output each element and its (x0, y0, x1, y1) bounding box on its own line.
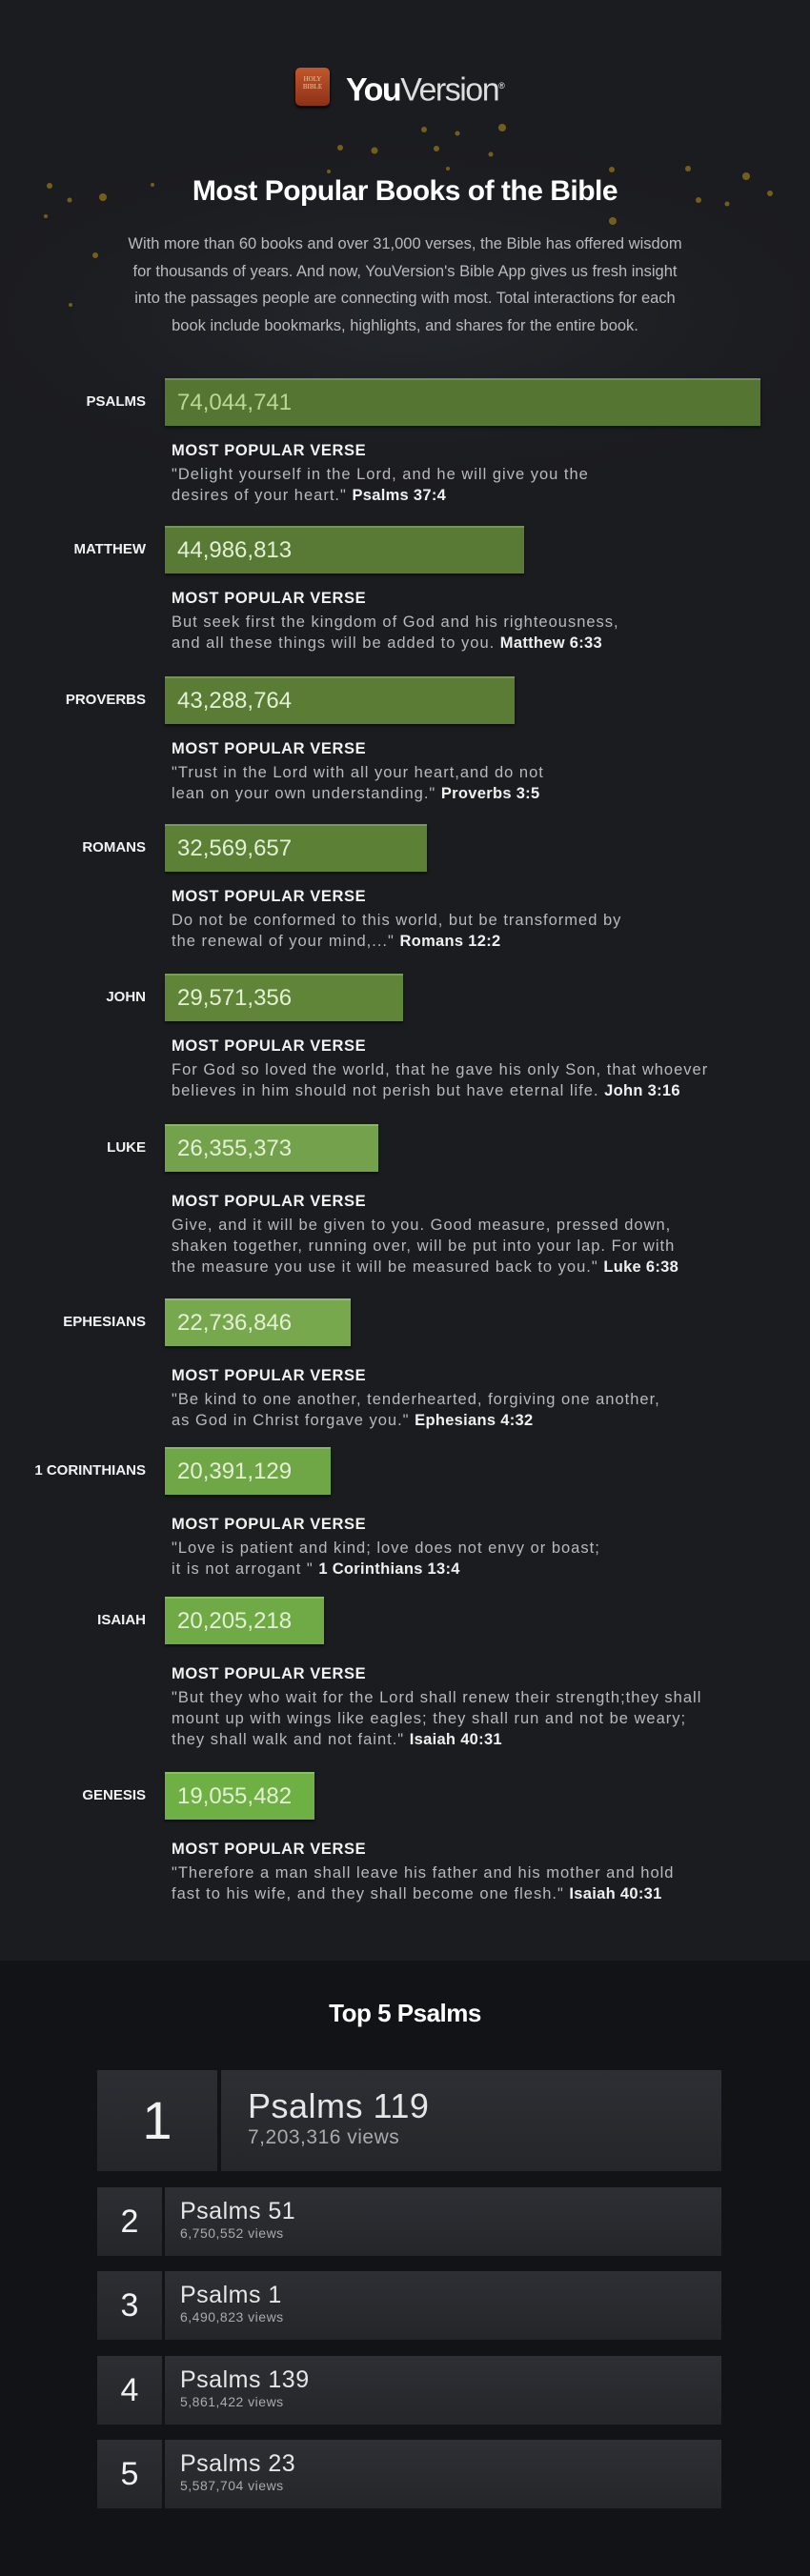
panel: Isaiah: they shall walk and not faint." Isaiah 40:31 (172, 1731, 502, 1748)
panel: Ephesians: EPHESIANS (63, 1314, 146, 1330)
row 4 (97, 2356, 721, 2425)
row 4: Psalms 139 (180, 2366, 310, 2393)
row 5: Psalms 23 (180, 2450, 295, 2477)
logo (294, 68, 505, 109)
bar: Ephesians: 22,736,846 (177, 1310, 292, 1336)
row 2: 6,750,552 views (180, 2225, 284, 2241)
panel: Genesis (82, 1772, 674, 1902)
intro text: into the passages people are connecting with most. Total interactions for each (134, 290, 676, 307)
panel: Romans: MOST POPULAR VERSE (172, 888, 366, 905)
bar: Psalms (165, 378, 760, 426)
bar: Genesis (165, 1772, 314, 1820)
row 1: 1 (142, 2090, 172, 2150)
row 2: Psalms 51 (180, 2198, 295, 2224)
panel: Luke: shaken together, running over, will be put into your lap. For with (172, 1238, 675, 1255)
panel: Romans: ROMANS (82, 839, 146, 855)
panel: Ephesians: "Be kind to one another, tenderhearted, forgiving one another, (172, 1391, 660, 1408)
row 5: 5,587,704 views (180, 2478, 284, 2493)
panel: 1 Corinthians: it is not arrogant " 1 Corinthians 13:4 (172, 1560, 460, 1578)
panel: Proverbs: MOST POPULAR VERSE (172, 740, 366, 757)
row 1: Psalms 119 (248, 2086, 429, 2125)
panel: Ephesians (63, 1298, 660, 1429)
bar: John: 29,571,356 (177, 985, 292, 1011)
row 2 (97, 2187, 721, 2256)
row 3: 6,490,823 views (180, 2309, 284, 2324)
row 3: 3 (121, 2287, 138, 2324)
panel: Isaiah: "But they who wait for the Lord shall renew their strength;they shall (172, 1689, 701, 1706)
panel: Matthew: But seek first the kingdom of God and his righteousness, (172, 614, 619, 631)
row 5 (97, 2440, 721, 2508)
panel: Romans (82, 824, 621, 950)
panel: Psalms (86, 378, 760, 504)
heading: Top 5 Psalms: Top 5 Psalms (329, 1999, 481, 2027)
bar: Proverbs (165, 676, 515, 724)
panel: Psalms: PSALMS (86, 393, 146, 410)
icon: bible: HOLY (304, 75, 321, 83)
panel: Isaiah: ISAIAH (97, 1612, 146, 1628)
panel: Proverbs: PROVERBS (66, 692, 146, 708)
panel: Proverbs: lean on your own understanding." Proverbs 3:5 (172, 785, 539, 802)
panel: Genesis: fast to his wife, and they shall become one flesh." Isaiah 40:31 (172, 1885, 662, 1902)
bar: Luke (165, 1124, 378, 1172)
panel: Luke: LUKE (107, 1139, 146, 1156)
bar: 1 Corinthians (165, 1447, 331, 1495)
panel: Matthew: MATTHEW (73, 541, 146, 557)
bar: Psalms: 74,044,741 (177, 390, 292, 415)
panel: Top 5 Psalms (0, 1961, 810, 2576)
intro text: for thousands of years. And now, YouVersion's Bible App gives us fresh insight (133, 263, 677, 280)
bar: Romans (165, 824, 427, 872)
icon: bible: BIBLE (303, 83, 322, 91)
bar: Luke: 26,355,373 (177, 1136, 292, 1161)
bar: Genesis: 19,055,482 (177, 1783, 292, 1809)
hero background (0, 0, 810, 572)
intro text: book include bookmarks, highlights, and shares for the entire book. (172, 317, 638, 334)
panel: Isaiah: MOST POPULAR VERSE (172, 1665, 366, 1682)
row 1: 7,203,316 views (248, 2126, 399, 2148)
row 3: Psalms 1 (180, 2282, 282, 2308)
panel: 1 Corinthians (34, 1447, 600, 1578)
intro text: With more than 60 books and over 31,000 verses, the Bible has offered wisdom (128, 235, 682, 252)
panel: John: For God so loved the world, that he gave his only Son, that whoever (172, 1061, 708, 1078)
panel: Psalms: MOST POPULAR VERSE (172, 442, 366, 459)
panel: Ephesians: as God in Christ forgave you." Ephesians 4:32 (172, 1412, 533, 1429)
row 1 (97, 2070, 721, 2171)
icon: bible (295, 68, 330, 106)
bar: 1 Corinthians: 20,391,129 (177, 1459, 292, 1484)
bar: Proverbs: 43,288,764 (177, 688, 292, 714)
panel: 1 Corinthians: MOST POPULAR VERSE (172, 1516, 366, 1533)
intro text (128, 235, 682, 334)
logo text: YouVersion® (346, 71, 503, 108)
row 4: 5,861,422 views (180, 2394, 284, 2409)
bar: John (165, 974, 403, 1021)
panel: John: believes in him should not perish but have eternal life. John 3:16 (172, 1082, 680, 1099)
panel: 1 Corinthians: "Love is patient and kind; love does not envy or boast; (172, 1540, 600, 1557)
bar: Matthew: 44,986,813 (177, 537, 292, 563)
panel: Luke (107, 1124, 678, 1276)
panel: Genesis: GENESIS (82, 1787, 146, 1803)
panel: Romans: Do not be conformed to this world, but be transformed by (172, 912, 621, 929)
panel: Proverbs: "Trust in the Lord with all your heart,and do not (172, 764, 544, 781)
panel: Genesis: MOST POPULAR VERSE (172, 1841, 366, 1858)
bar: Matthew (165, 526, 524, 574)
title: Most Popular Books of the Bible (192, 175, 618, 207)
panel: Matthew: MOST POPULAR VERSE (172, 590, 366, 607)
panel: Luke: Give, and it will be given to you. Good measure, pressed down, (172, 1217, 671, 1234)
panel: Genesis: "Therefore a man shall leave his father and his mother and hold (172, 1864, 674, 1882)
bar: Isaiah (165, 1597, 324, 1644)
panel: Luke: the measure you use it will be measured back to you." Luke 6:38 (172, 1258, 678, 1276)
panel: Isaiah (97, 1597, 701, 1748)
panel: Proverbs (66, 676, 544, 802)
panel: Luke: MOST POPULAR VERSE (172, 1193, 366, 1210)
row 4: 4 (121, 2372, 138, 2408)
panel: John: MOST POPULAR VERSE (172, 1037, 366, 1055)
panel: John (106, 974, 708, 1099)
row 5: 5 (121, 2456, 138, 2492)
panel: Psalms: desires of your heart." Psalms 37:4 (172, 487, 446, 504)
panel: Psalms: "Delight yourself in the Lord, and he will give you the (172, 466, 589, 483)
panel: Romans: the renewal of your mind,..." Romans 12:2 (172, 933, 500, 950)
bar: Romans: 32,569,657 (177, 835, 292, 861)
bar: Ephesians (165, 1298, 351, 1346)
panel: Ephesians: MOST POPULAR VERSE (172, 1367, 366, 1384)
row 3 (97, 2271, 721, 2340)
panel: John: JOHN (106, 989, 146, 1005)
row 2: 2 (121, 2204, 138, 2240)
bar: Isaiah: 20,205,218 (177, 1608, 292, 1634)
panel: Matthew: and all these things will be added to you. Matthew 6:33 (172, 634, 602, 652)
network dots decoration (44, 124, 773, 307)
panel: 1 Corinthians: 1 CORINTHIANS (34, 1462, 146, 1479)
panel: Isaiah: mount up with wings like eagles; they shall run and not be weary; (172, 1710, 686, 1727)
panel: Matthew (73, 526, 619, 652)
